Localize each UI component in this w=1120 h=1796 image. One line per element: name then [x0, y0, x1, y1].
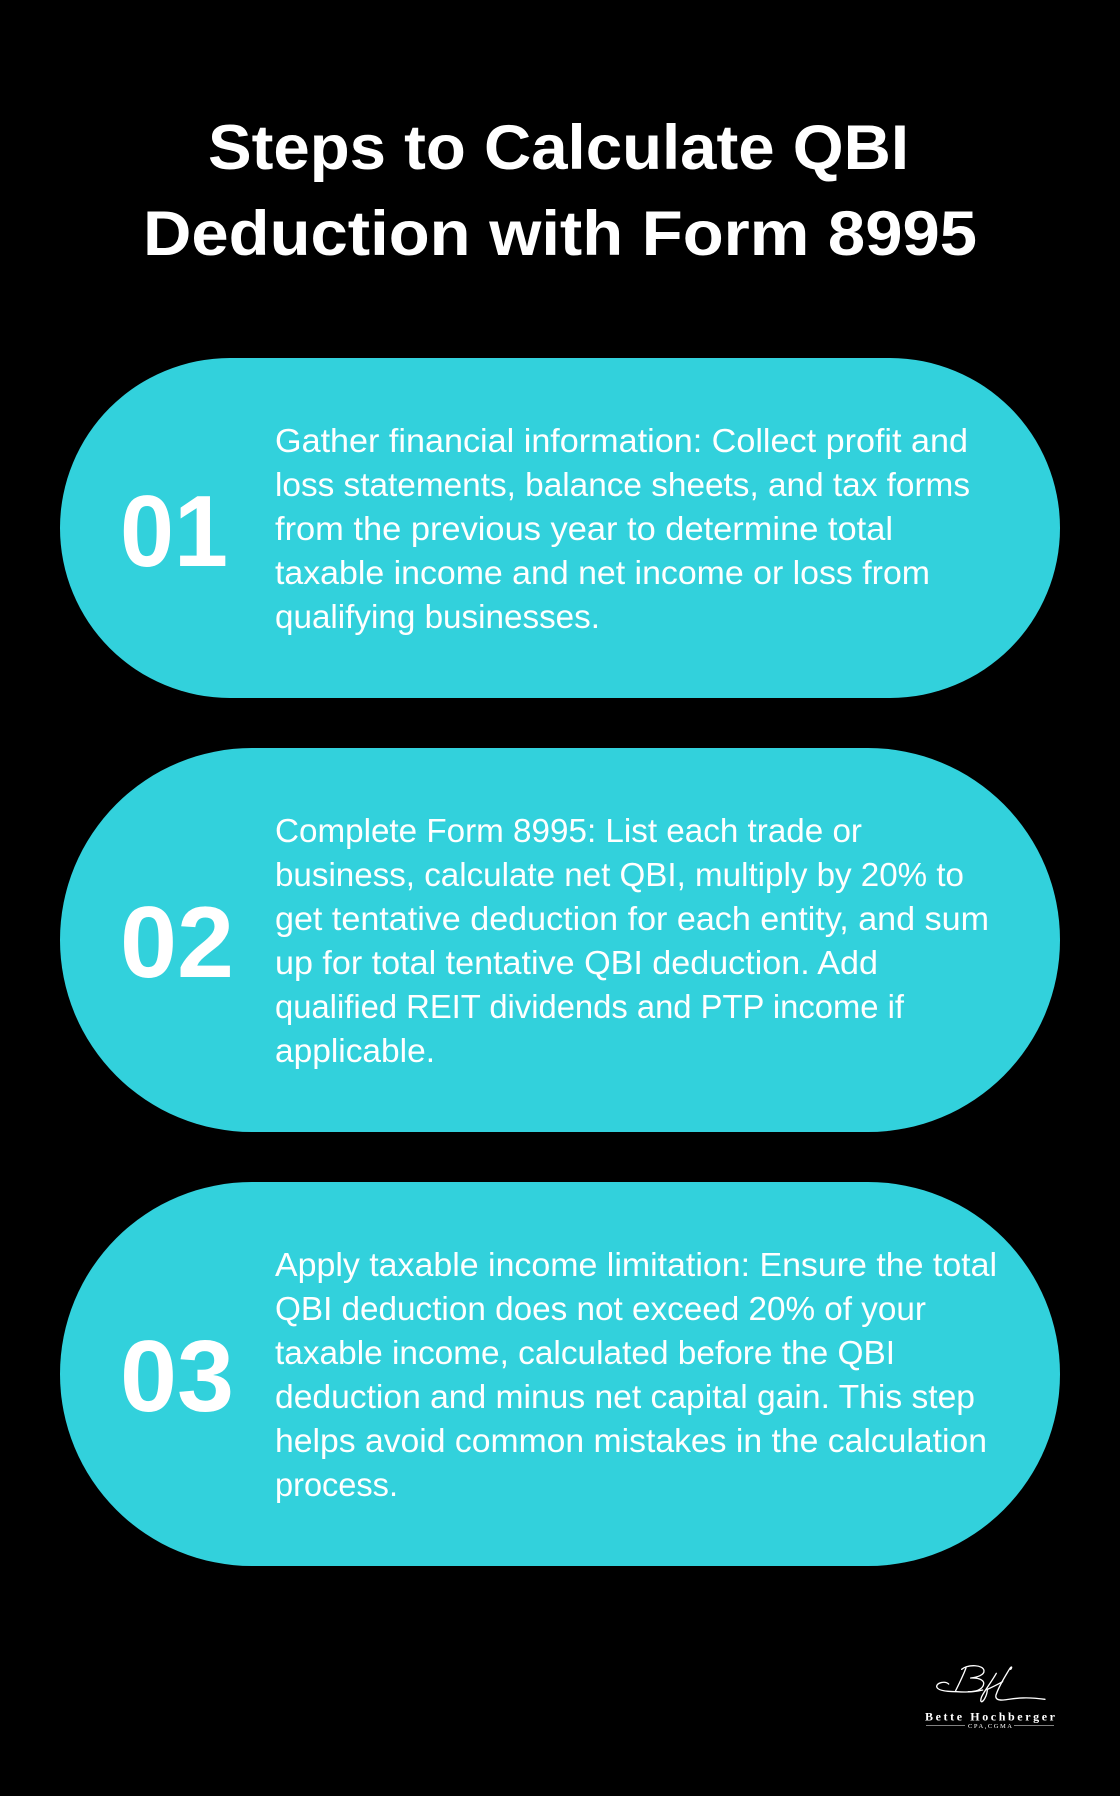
text block: step 01: loss statements, balance sheets, and tax forms: [275, 466, 970, 503]
pill background 02: [60, 748, 1060, 1132]
text block: step 03: QBI deduction does not exceed 20% of your: [275, 1290, 926, 1327]
text block: step 03: taxable income, calculated before the QBI: [275, 1334, 895, 1371]
title: [143, 113, 977, 269]
panel: step 03: [60, 1182, 1060, 1566]
number 03: 03: [120, 1321, 234, 1433]
panel: step 02: [60, 748, 1060, 1132]
text block: step 03: helps avoid common mistakes in the calculation: [275, 1422, 987, 1459]
pill background 03: [60, 1182, 1060, 1566]
text block: step 03: deduction and minus net capital gain. This step: [275, 1378, 975, 1415]
panel: step 01: [60, 358, 1060, 698]
text block: step 02: up for total tentative QBI deduction. Add: [275, 944, 878, 981]
text block: step 01: qualifying businesses.: [275, 598, 600, 635]
number 02: 02: [120, 887, 234, 999]
title: Deduction with Form 8995: [143, 199, 977, 269]
text block: step 02: applicable.: [275, 1032, 435, 1069]
text block: step 02: [275, 812, 989, 1069]
text block: step 02: qualified REIT dividends and PTP income if: [275, 988, 905, 1025]
logo name: Bette Hochberger: [925, 1710, 1056, 1724]
text block: step 03: process.: [275, 1466, 398, 1503]
text block: step 03: Apply taxable income limitation: Ensure the total: [275, 1246, 997, 1283]
pill background 01: [60, 358, 1060, 698]
text block: step 01: [275, 422, 970, 635]
logo: Bette Hochberger signature: [925, 1666, 1056, 1730]
text block: step 01: taxable income and net income or loss from: [275, 554, 930, 591]
icon: BH signature: [937, 1666, 1045, 1702]
text block: step 01: from the previous year to determine total: [275, 510, 893, 547]
number 01: 01: [120, 476, 228, 588]
title: Steps to Calculate QBI: [208, 113, 909, 183]
text block: step 02: business, calculate net QBI, multiply by 20% to: [275, 856, 964, 893]
logo credential: CPA,CGMA: [968, 1723, 1012, 1730]
text block: step 02: Complete Form 8995: List each trade or: [275, 812, 862, 849]
text block: step 01: Gather financial information: Collect profit and: [275, 422, 968, 459]
text block: step 02: get tentative deduction for each entity, and sum: [275, 900, 989, 937]
text block: step 03: [275, 1246, 997, 1503]
